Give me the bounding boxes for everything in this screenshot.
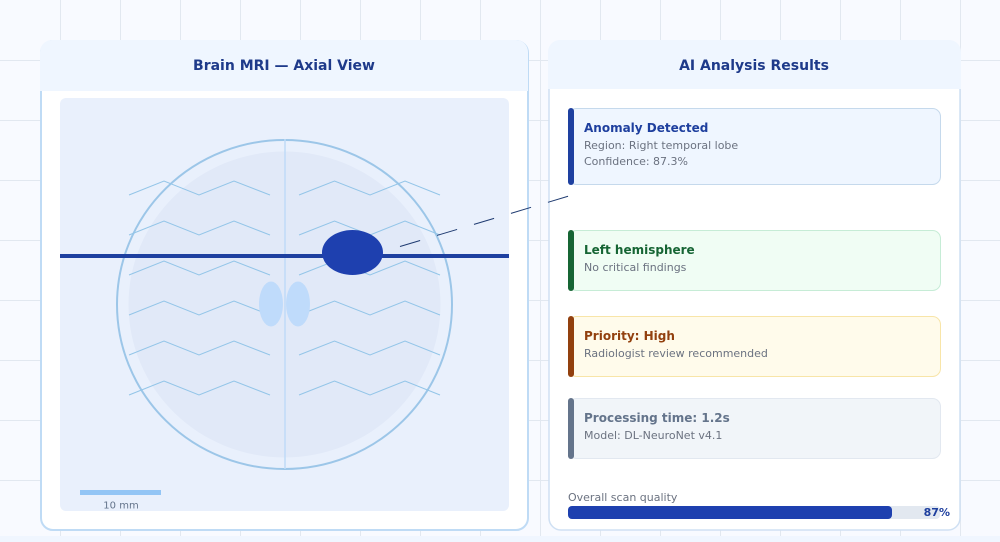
sulci: right hemisphere xyxy=(299,181,440,395)
heading: results: AI Analysis Results xyxy=(679,58,829,74)
scale bar: 10 mm xyxy=(103,500,139,512)
midline xyxy=(284,139,286,469)
scan quality meter xyxy=(568,491,950,519)
scan quality meter: 87% xyxy=(924,506,950,519)
MRI image area xyxy=(60,98,509,512)
card: anomaly detected xyxy=(568,108,940,185)
panel: AI analysis results xyxy=(548,40,961,530)
card: left hemisphere: No critical findings xyxy=(584,261,687,274)
brain inner tissue xyxy=(128,152,440,458)
scale bar xyxy=(80,490,161,512)
card: left hemisphere xyxy=(568,230,940,291)
card: processing time: Model: DL-NeuroNet v4.1 xyxy=(584,429,722,442)
anomaly marker xyxy=(322,230,383,275)
card: anomaly detected: Confidence: 87.3% xyxy=(584,155,688,168)
card: processing time: Processing time: 1.2s xyxy=(584,411,730,425)
ventricles xyxy=(259,282,310,326)
card: processing time xyxy=(568,398,940,459)
card: priority: Priority: High xyxy=(584,329,675,343)
card: priority: Radiologist review recommended xyxy=(584,347,768,360)
panel: brain MRI xyxy=(40,40,528,530)
brain outer outline xyxy=(117,140,452,469)
card: priority xyxy=(568,316,940,377)
sulci: left hemisphere xyxy=(129,181,270,395)
panel header: brain MRI xyxy=(40,40,528,91)
panel header: results xyxy=(548,40,961,89)
callout connector line xyxy=(400,196,570,246)
scan quality meter: Overall scan quality xyxy=(568,491,678,504)
card: anomaly detected: Region: Right temporal lobe xyxy=(584,139,738,152)
heading: brain MRI: Brain MRI — Axial View xyxy=(193,58,375,74)
scan line xyxy=(60,254,509,258)
card: anomaly detected: Anomaly Detected xyxy=(584,121,708,135)
card: left hemisphere: Left hemisphere xyxy=(584,243,695,257)
